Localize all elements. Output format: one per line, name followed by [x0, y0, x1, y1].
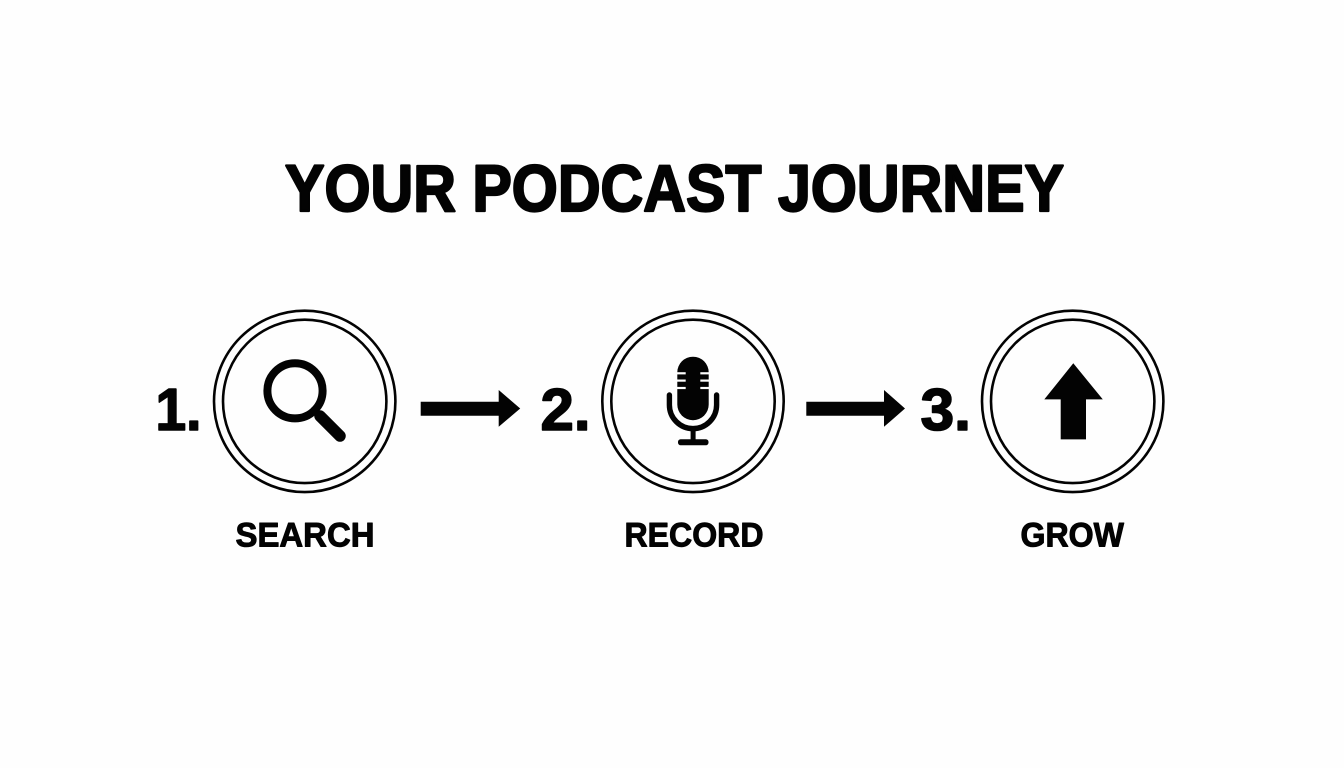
arrow: step 1 to step 2 [421, 390, 520, 427]
double ring 2 [602, 311, 784, 492]
icon: magnifying glass [267, 363, 340, 436]
double ring 1 [214, 311, 395, 492]
step 2: record [540, 311, 784, 555]
icon: up arrow [1044, 363, 1103, 439]
step 3: grow [920, 311, 1163, 555]
label: grow: GROW [1020, 517, 1124, 555]
step number 2: 2. [540, 377, 590, 443]
arrow: step 2 to step 3 [806, 390, 905, 427]
step number 1: 1. [156, 377, 202, 443]
icon: microphone [669, 357, 717, 445]
label: record: RECORD [624, 517, 764, 555]
step 1: search [156, 311, 395, 555]
double ring 3 [982, 311, 1163, 492]
title: YOUR PODCAST JOURNEY [285, 152, 1064, 225]
label: search: SEARCH [236, 517, 374, 555]
step number 3: 3. [920, 377, 971, 443]
